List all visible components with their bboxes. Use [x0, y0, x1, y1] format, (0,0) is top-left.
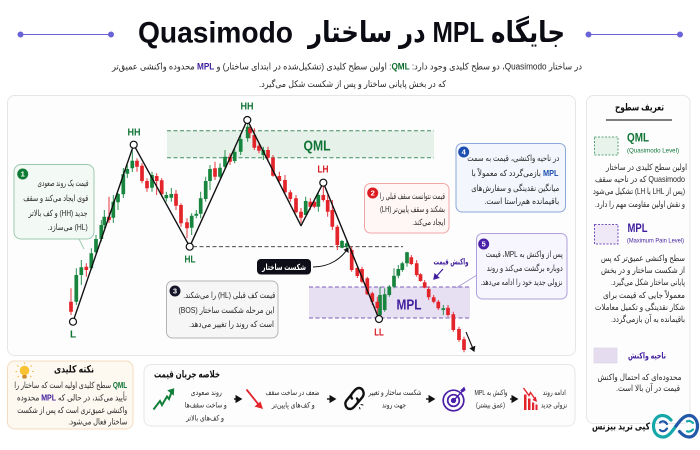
intro text: که در بخش پایانی ساختار و پس از شکست شکل می‌گیرد.	[259, 78, 447, 89]
flow step 5: نزولی جدید	[541, 400, 567, 410]
arrow: price reaction	[434, 269, 443, 279]
callout 3: این مرحله شکست ساختار (BOS)	[178, 305, 274, 315]
flow step 3: شکست ساختار و تغییر	[368, 388, 422, 397]
panel: main chart	[8, 96, 576, 356]
MPL zone: MPL	[396, 296, 422, 314]
swing point labels: HH	[128, 128, 140, 138]
callout 2: 2	[371, 188, 375, 198]
callout 4: باقیمانده هم‌راستا است.	[484, 196, 559, 207]
QML definition	[593, 132, 687, 210]
flow step 4	[475, 388, 508, 410]
icon: uptrend arrow	[154, 388, 174, 410]
title decoration: right	[586, 32, 682, 37]
swing point labels: HH	[240, 102, 254, 112]
flow step 4: (عمق بیشتر)	[476, 400, 505, 410]
flow step 3: جهت روند	[382, 400, 406, 410]
callout 5: پس از واکنش به MPL، قیمت	[486, 249, 563, 259]
price structure zigzag line	[73, 120, 379, 322]
break level dashed line	[193, 246, 403, 248]
MPL definition	[594, 223, 685, 324]
callout 2	[364, 184, 449, 233]
arrow: step 2 to 3	[327, 398, 335, 400]
callout 5: 5	[482, 240, 486, 248]
swing point labels: LH	[318, 164, 328, 176]
panel: price flow summary: خلاصه جریان قیمت	[154, 370, 220, 380]
callout 2: ایجاد می‌کند.	[412, 217, 445, 227]
callout 3: است که روند را تغییر می‌دهد.	[189, 319, 274, 329]
callout 1: جدید (HH) و کف بالاتر	[28, 208, 88, 218]
callout 2: قیمت نتوانست سقف قبلی را	[380, 191, 445, 201]
icon: target	[443, 388, 465, 411]
icon: falling bars	[524, 388, 538, 410]
callout 3: قیمت کف قبلی (HL) را می‌شکند.	[183, 290, 275, 300]
price reaction label: واکنش قیمت	[434, 256, 468, 268]
title	[138, 15, 565, 50]
panel: key note: تأیید می‌کند، در حالی که MPL محدوده	[17, 392, 128, 402]
QML definition: (Quasimodo Level)	[627, 148, 679, 154]
MPL definition: (Maximum Pain Level)	[627, 238, 684, 244]
break of structure label	[257, 259, 311, 274]
flow step 4: واکنش به MPL	[475, 388, 508, 397]
reaction zone definition: محدوده‌ای که احتمال واکنش	[598, 372, 682, 382]
panel: key note: QML سطح کلیدی اولیه است که ساختار را	[14, 380, 127, 390]
title: جایگاه MPL در ساختار	[306, 15, 565, 49]
flow step 1: و کف‌های بالاتر	[185, 414, 224, 422]
callout 5	[456, 234, 567, 299]
QML zone	[167, 131, 434, 158]
logo: کپی ترید بیزنس	[592, 422, 650, 432]
break of structure label: شکست ساختار	[261, 262, 306, 273]
arrow: break of structure	[313, 248, 348, 267]
swing point markers	[70, 116, 382, 325]
callout 1: (HL) می‌سازد.	[48, 222, 88, 232]
callout 3	[166, 281, 278, 338]
candlesticks	[71, 123, 464, 352]
QML definition: (پس از LHL یا LH) تشکیل می‌شود	[593, 186, 685, 196]
callout 1	[14, 164, 94, 249]
panel: key note: نکته کلیدی	[54, 364, 94, 376]
reaction zone definition: ناحیه واکنش	[628, 350, 666, 362]
callout 3: 3	[173, 286, 177, 296]
MPL definition: از شکست ساختار و در بخش	[601, 265, 685, 275]
intro text: در ساختار Quasimodo، دو سطح کلیدی وجود دارد: QML: اولین سطح کلیدی (تشکیل‌شده در ابتدای ساختار) و MPL محدوده واکنشی عمیق‌تر	[111, 62, 582, 72]
swing point labels	[70, 102, 384, 340]
title: Quasimodo	[138, 16, 293, 50]
callout 2: بشکند و سقف پایین‌تر (LH)	[380, 204, 445, 214]
panel: level definitions: تعریف سطوح	[615, 102, 664, 114]
panel: level definitions	[586, 96, 690, 424]
panel: price flow summary	[144, 364, 575, 426]
title decoration: left	[18, 32, 114, 37]
flow step 5: ادامه روند	[543, 388, 566, 397]
icon: broken chain	[345, 388, 364, 409]
callout 4: MPL بازمی‌گردد که معمولاً با	[471, 167, 558, 178]
callout 5: نزولی جدید خود را ادامه می‌دهد.	[480, 277, 562, 287]
callout 4: 4	[462, 148, 467, 156]
QML zone: QML	[304, 138, 330, 154]
callout 1: 1	[21, 170, 25, 178]
arrow: step 3 to 4	[426, 398, 434, 400]
flow step 1: روند صعودی	[191, 388, 222, 397]
reaction zone definition: قیمت در آن بالا است.	[616, 382, 680, 393]
swing point labels: HL	[184, 254, 196, 266]
flow step 5	[541, 388, 567, 410]
swing point labels: LL	[374, 328, 384, 338]
callout 4: در ناحیه واکنشی، قیمت به سمت	[467, 153, 559, 163]
MPL zone	[309, 287, 470, 318]
QML definition: Quasimodo که در ناحیه سقف	[595, 174, 685, 184]
arrow: step 4 to 5	[510, 398, 517, 400]
flow step 1: و ساخت سقف‌ها	[185, 400, 227, 410]
flow step 2: و کف‌های پایین‌تر	[271, 400, 315, 410]
flow step 2	[266, 388, 320, 410]
callout 1: قوی ایجاد می‌کند و سقف	[23, 193, 88, 203]
QML definition: QML	[627, 132, 649, 144]
reaction zone definition	[594, 348, 682, 393]
callout 4: میانگین نقدینگی و سفارش‌های	[471, 183, 559, 193]
panel: key note	[8, 361, 133, 429]
MPL definition: معمولاً جایی که قیمت برای	[603, 289, 685, 300]
swing point labels: L	[70, 330, 76, 340]
flow step 2: ضعف در ساخت سقف	[266, 388, 320, 397]
arrow: step 1 to 2	[234, 398, 241, 400]
panel: key note: واکنشی عمیق‌تری است که پس از شکست	[17, 405, 127, 415]
flow step 1	[185, 388, 227, 422]
MPL definition: MPL	[628, 223, 648, 235]
logo	[592, 416, 698, 437]
intro text	[111, 62, 582, 89]
flow step 3	[368, 388, 422, 410]
callout 4	[456, 144, 566, 212]
icon: light bulb	[16, 362, 34, 378]
panel: key note: ساختار فعال می‌شود.	[68, 416, 127, 426]
icon: weakening red arrow	[246, 390, 263, 409]
arrow: continuation	[466, 332, 474, 351]
callout 5: دوباره برگشت می‌کند و روند	[487, 263, 563, 273]
callout 1: قیمت یک روند صعودی	[38, 178, 88, 188]
